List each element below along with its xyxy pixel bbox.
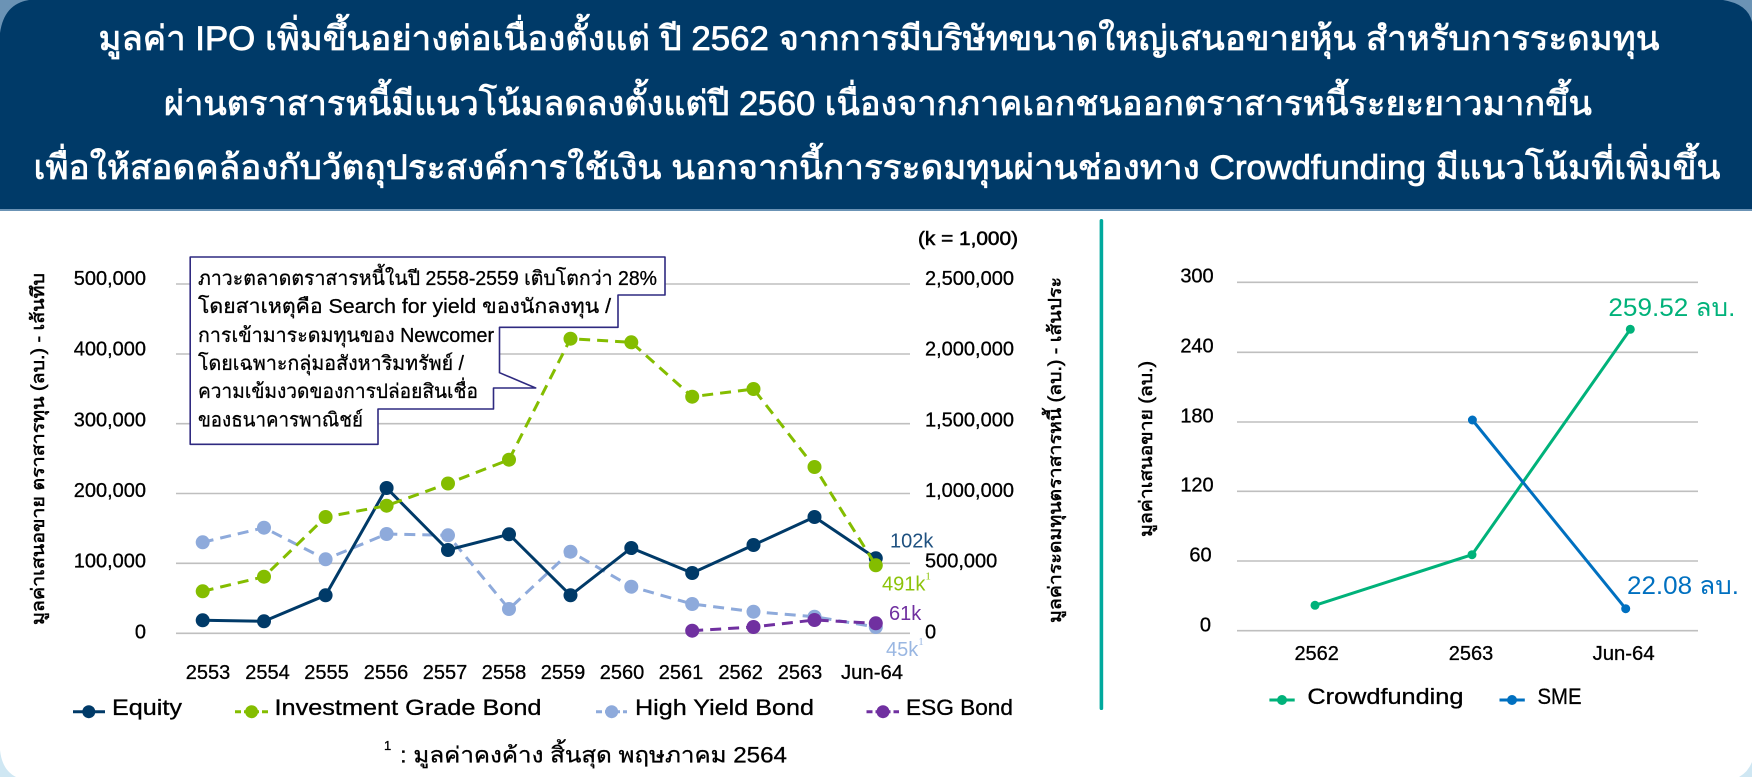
axis labels: 240 xyxy=(1180,336,1214,358)
right panel: crowdfunding and SME line chart xyxy=(1136,266,1739,709)
category labels: 2557 xyxy=(423,662,467,684)
end value labels: 102k xyxy=(890,531,934,553)
left axis title: มูลค่าเสนอขาย ตราสารทุน (ลบ.) - เส้นทึบ xyxy=(28,273,49,625)
callout: bond market growth: โดยสาเหตุคือ Search for yield ของนักลงทุน / xyxy=(198,295,611,319)
category labels: Jun-64 xyxy=(841,662,903,684)
end value labels: 45k xyxy=(886,639,918,661)
category labels: 2563 xyxy=(778,662,822,684)
category labels: 2556 xyxy=(364,662,408,684)
axis labels: 180 xyxy=(1180,406,1214,428)
title banner: มูลค่า IPO เพิ่มขึ้นอย่างต่อเนื่องตั้งแต่ ปี 2562 จากการมีบริษัทขนาดใหญ่เสนอขายหุ้น สำหรับการระดมทุน xyxy=(98,14,1659,59)
right axis labels: 500,000 xyxy=(925,550,997,572)
right axis title: มูลค่าระดมทุนตราสารหนี้ (ลบ.) - เส้นประ xyxy=(1042,277,1066,623)
axis title: มูลค่าเสนอขาย (ลบ.) xyxy=(1136,361,1157,537)
category labels: 2562 xyxy=(718,662,763,684)
left panel: fundraising line chart xyxy=(28,229,1066,769)
axis labels xyxy=(1180,266,1214,637)
left axis labels: 300,000 xyxy=(74,410,146,432)
legend: left chart: Equity xyxy=(112,695,182,720)
title banner: เพื่อให้สอดคล้องกับวัตถุประสงค์การใช้เงิน นอกจากนี้การระดมทุนผ่านช่องทาง Crowdfunding มีแนวโน้มที่เพิ่มขึ้น xyxy=(34,143,1720,188)
series: investment grade bond xyxy=(196,332,883,598)
callout: bond market growth: การเข้ามาระดมทุนของ Newcomer xyxy=(198,325,494,348)
left axis labels xyxy=(74,268,146,643)
legend: right chart xyxy=(1269,684,1582,709)
callout: bond market growth: ความเข้มงวดของการปล่อยสินเชื่อ xyxy=(198,377,478,403)
legend: right chart: SME xyxy=(1538,684,1582,709)
axis labels: 300 xyxy=(1180,266,1214,288)
category labels: 2554 xyxy=(245,662,290,684)
end value labels xyxy=(882,531,934,661)
callout: bond market growth: ภาวะตลาดตราสารหนี้ในปี 2558-2559 เติบโตกว่า 28% xyxy=(198,264,657,290)
category labels: 2562 xyxy=(1294,643,1339,665)
right axis labels: 2,500,000 xyxy=(925,268,1014,290)
legend: left chart: High Yield Bond xyxy=(635,695,814,720)
category labels: 2561 xyxy=(659,662,703,684)
category labels xyxy=(1294,643,1655,665)
right axis labels: 1,000,000 xyxy=(925,480,1014,502)
footnote: : มูลค่าคงค้าง สิ้นสุด พฤษภาคม 2564 xyxy=(400,740,787,769)
end value labels: 61k xyxy=(889,603,922,625)
end value labels: 1 xyxy=(925,571,931,583)
series: crowdfunding xyxy=(1310,325,1635,610)
right axis labels: 0 xyxy=(925,621,936,643)
footnote: 1 xyxy=(384,738,391,753)
category labels: 2563 xyxy=(1449,643,1493,665)
series: high yield bond xyxy=(196,521,883,634)
axis labels: 60 xyxy=(1189,545,1212,567)
legend: left chart xyxy=(73,695,1013,720)
value label: SME: 22.08 ลบ. xyxy=(1627,572,1739,600)
left axis labels: 500,000 xyxy=(74,268,146,290)
series: SME xyxy=(1468,416,1630,613)
category labels: 2559 xyxy=(541,662,585,684)
left axis labels: 100,000 xyxy=(74,550,146,572)
left axis labels: 200,000 xyxy=(74,480,146,502)
category labels xyxy=(186,662,903,684)
series: ESG bond xyxy=(685,613,883,638)
callout: bond market growth xyxy=(190,257,665,444)
legend: left chart: Investment Grade Bond xyxy=(274,695,542,720)
category labels: Jun-64 xyxy=(1593,643,1655,665)
divider between charts xyxy=(1100,219,1103,710)
end value labels: 491k xyxy=(882,574,925,596)
title banner: ผ่านตราสารหนี้มีแนวโน้มลดลงตั้งแต่ปี 2560 เนื่องจากภาคเอกชนออกตราสารหนี้ระยะยาวมากขึ้น xyxy=(164,79,1592,123)
series: equity xyxy=(196,481,883,628)
left axis labels: 400,000 xyxy=(74,339,146,361)
callout: bond market growth: ของธนาคารพาณิชย์ xyxy=(198,409,363,432)
category labels: 2553 xyxy=(186,662,230,684)
category labels: 2558 xyxy=(482,662,526,684)
callout: bond market growth: โดยเฉพาะกลุ่มอสังหาริมทรัพย์ / xyxy=(198,352,464,376)
right axis unit note: (k = 1,000) xyxy=(918,229,1018,250)
legend: left chart: ESG Bond xyxy=(906,695,1013,720)
right axis labels xyxy=(925,268,1014,643)
category labels: 2560 xyxy=(600,662,644,684)
title banner xyxy=(0,0,1752,211)
axis labels: 120 xyxy=(1180,475,1214,497)
left axis labels: 0 xyxy=(135,621,146,643)
right axis labels: 1,500,000 xyxy=(925,410,1014,432)
value label: crowdfunding: 259.52 ลบ. xyxy=(1608,294,1735,322)
end value labels: 1 xyxy=(918,636,924,648)
axis labels: 0 xyxy=(1200,615,1211,637)
right axis labels: 2,000,000 xyxy=(925,339,1014,361)
category labels: 2555 xyxy=(304,662,349,684)
legend: right chart: Crowdfunding xyxy=(1307,684,1463,709)
